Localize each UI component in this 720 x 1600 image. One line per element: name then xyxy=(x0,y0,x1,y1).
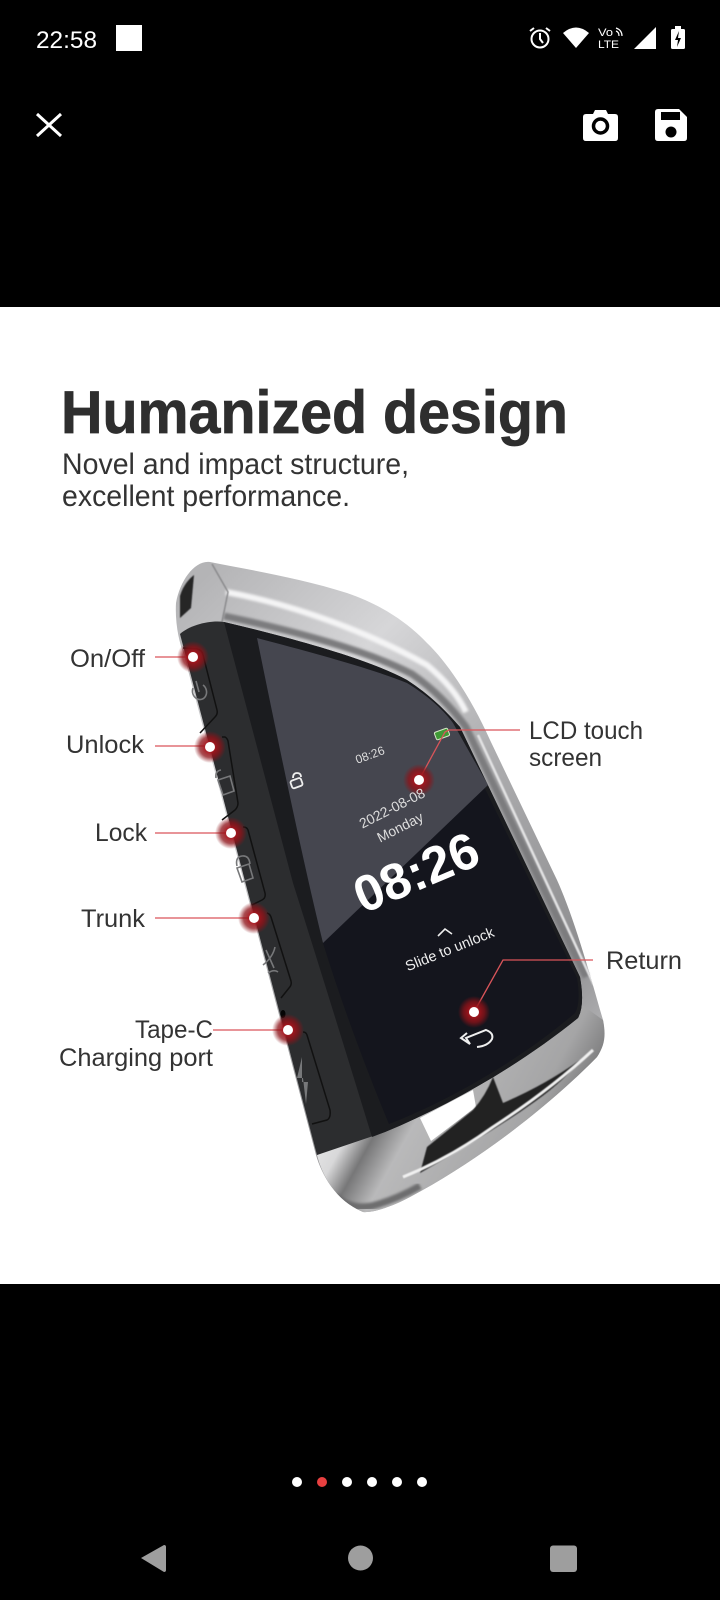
icon: save xyxy=(655,109,687,141)
lower chrome xyxy=(317,1005,605,1212)
callout labels: Return xyxy=(606,947,682,975)
pagination dots xyxy=(292,1477,427,1487)
icon: alarm clock xyxy=(530,28,550,48)
side buttons xyxy=(183,648,330,1124)
shell highlight xyxy=(226,592,466,712)
chrome window xyxy=(420,1090,476,1141)
icon: lightning xyxy=(297,1057,308,1104)
icon: signal xyxy=(634,27,656,49)
shell right streak xyxy=(478,735,594,985)
screen: weekday: Monday xyxy=(374,809,426,845)
image panel: white product card xyxy=(0,307,720,1284)
notification icon: white square xyxy=(116,25,142,51)
icon: camera xyxy=(583,110,618,141)
chrome rim xyxy=(403,1050,593,1177)
key fob illustration xyxy=(176,562,605,1212)
callout markers xyxy=(177,641,490,1046)
title: Humanized design xyxy=(61,379,568,446)
icon: return arrow xyxy=(461,1030,492,1047)
subtitle: Novel and impact structure, xyxy=(62,448,409,481)
icon: VoLTE: LTE xyxy=(598,39,619,51)
icon: close xyxy=(37,114,61,136)
icon: VoLTE xyxy=(598,27,622,51)
chrome reflection xyxy=(420,1060,580,1173)
subtitle xyxy=(62,448,409,513)
subtitle: excellent performance. xyxy=(62,480,350,513)
callout labels: On/Off xyxy=(70,645,145,673)
top notch xyxy=(180,575,194,618)
screen: lock icon xyxy=(290,773,303,789)
status bar xyxy=(36,25,685,54)
callout labels: Trunk xyxy=(81,905,145,933)
callout lines xyxy=(155,657,593,1030)
nav: back xyxy=(141,1545,166,1572)
status time: 22:58 xyxy=(36,27,97,54)
callout labels xyxy=(59,645,682,1072)
screen black area xyxy=(257,638,579,1124)
icon: battery xyxy=(434,728,450,740)
navigation bar xyxy=(141,1545,577,1572)
icon: charging battery xyxy=(671,26,685,49)
button icons xyxy=(192,681,278,973)
callout labels: Unlock xyxy=(66,731,145,759)
screen: slide to unlock: Slide to unlock xyxy=(403,925,497,975)
nav: recents xyxy=(550,1546,577,1572)
top toolbar xyxy=(37,109,687,141)
screen: big clock: 08:26 xyxy=(345,821,487,924)
chrome outer shading xyxy=(336,1186,420,1207)
screen gray area xyxy=(257,638,488,943)
callout labels: Tape-C xyxy=(135,1016,213,1044)
speaker hole xyxy=(280,1010,286,1018)
bezel xyxy=(224,622,582,1137)
body side xyxy=(180,622,582,1155)
tip facet xyxy=(212,564,228,622)
shell lower shading xyxy=(224,616,586,977)
icon: VoLTE: Vo xyxy=(598,27,613,39)
screen: small time: 08:26 xyxy=(353,743,387,767)
silver shell xyxy=(176,562,604,1212)
chevron up xyxy=(438,929,452,936)
callout labels: screen xyxy=(529,744,602,772)
callout labels: LCD touch xyxy=(529,717,643,745)
callout labels: Lock xyxy=(95,819,147,847)
icon: wifi xyxy=(563,28,589,48)
callout labels: Charging port xyxy=(59,1044,213,1072)
screen: date: 2022-08-08 xyxy=(356,785,428,831)
nav: home xyxy=(348,1546,373,1570)
